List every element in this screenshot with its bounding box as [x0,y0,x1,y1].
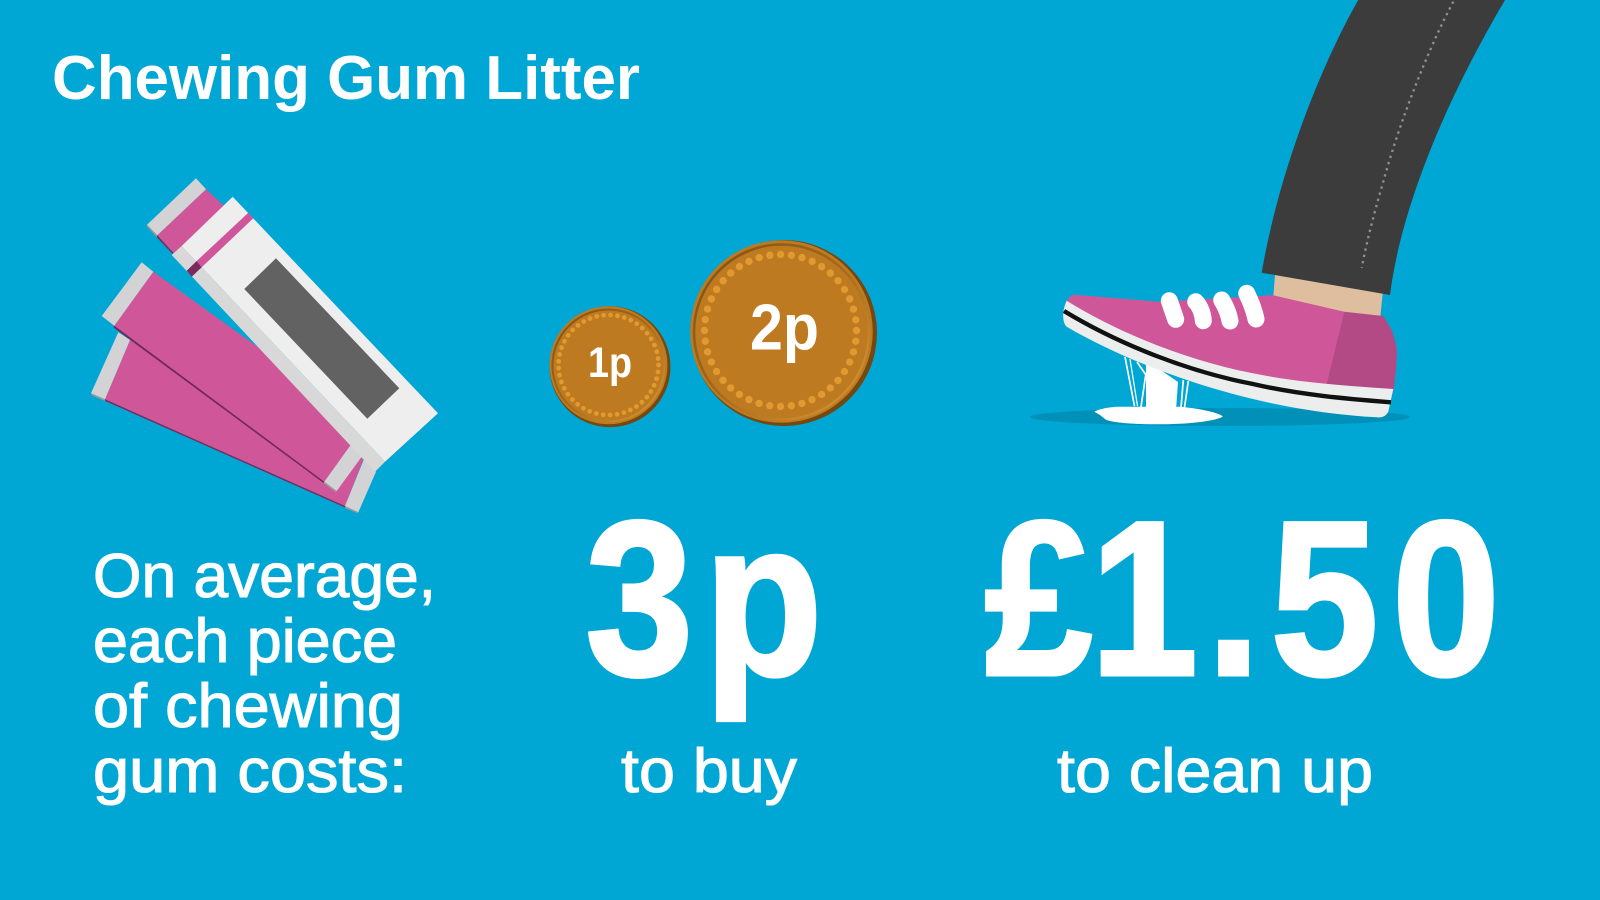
ground shadow [1030,408,1410,426]
caption: to clean up: to clean up [1057,737,1373,806]
shoe upper [1067,295,1344,390]
stat: 3p: 3p [585,475,822,721]
illustration: shoe stepping on gum [1030,275,1410,426]
gum puddle and strings [1094,357,1223,424]
2p label: 2p [750,290,819,363]
shoe sole [1063,301,1393,417]
ankle [1273,275,1383,320]
stat: £1.50: £1.50 [985,475,1500,721]
text block: intro: each piece [93,607,397,676]
shoe heel panel [1326,312,1397,392]
text block: intro [93,542,436,806]
icon: 2p coin [690,240,877,426]
text block: intro: gum costs: [93,737,407,806]
caption: to buy: to buy [621,737,797,806]
icon: chewing gum pack [91,178,438,514]
icon: 1p coin [550,306,670,427]
trouser stitching [1362,2,1453,268]
text block: intro: of chewing [93,672,403,741]
illustration: trouser leg [1262,0,1505,295]
gum packet box [172,197,438,472]
title: Chewing Gum Litter [52,44,640,113]
shoe laces [1169,293,1256,321]
sole stripe [1064,311,1391,402]
gum stick: middle [102,262,362,492]
text block: intro: On average, [93,542,436,611]
1p label: 1p [588,339,632,387]
gum stick: back [146,178,235,265]
gum stick: bottom [91,332,376,514]
